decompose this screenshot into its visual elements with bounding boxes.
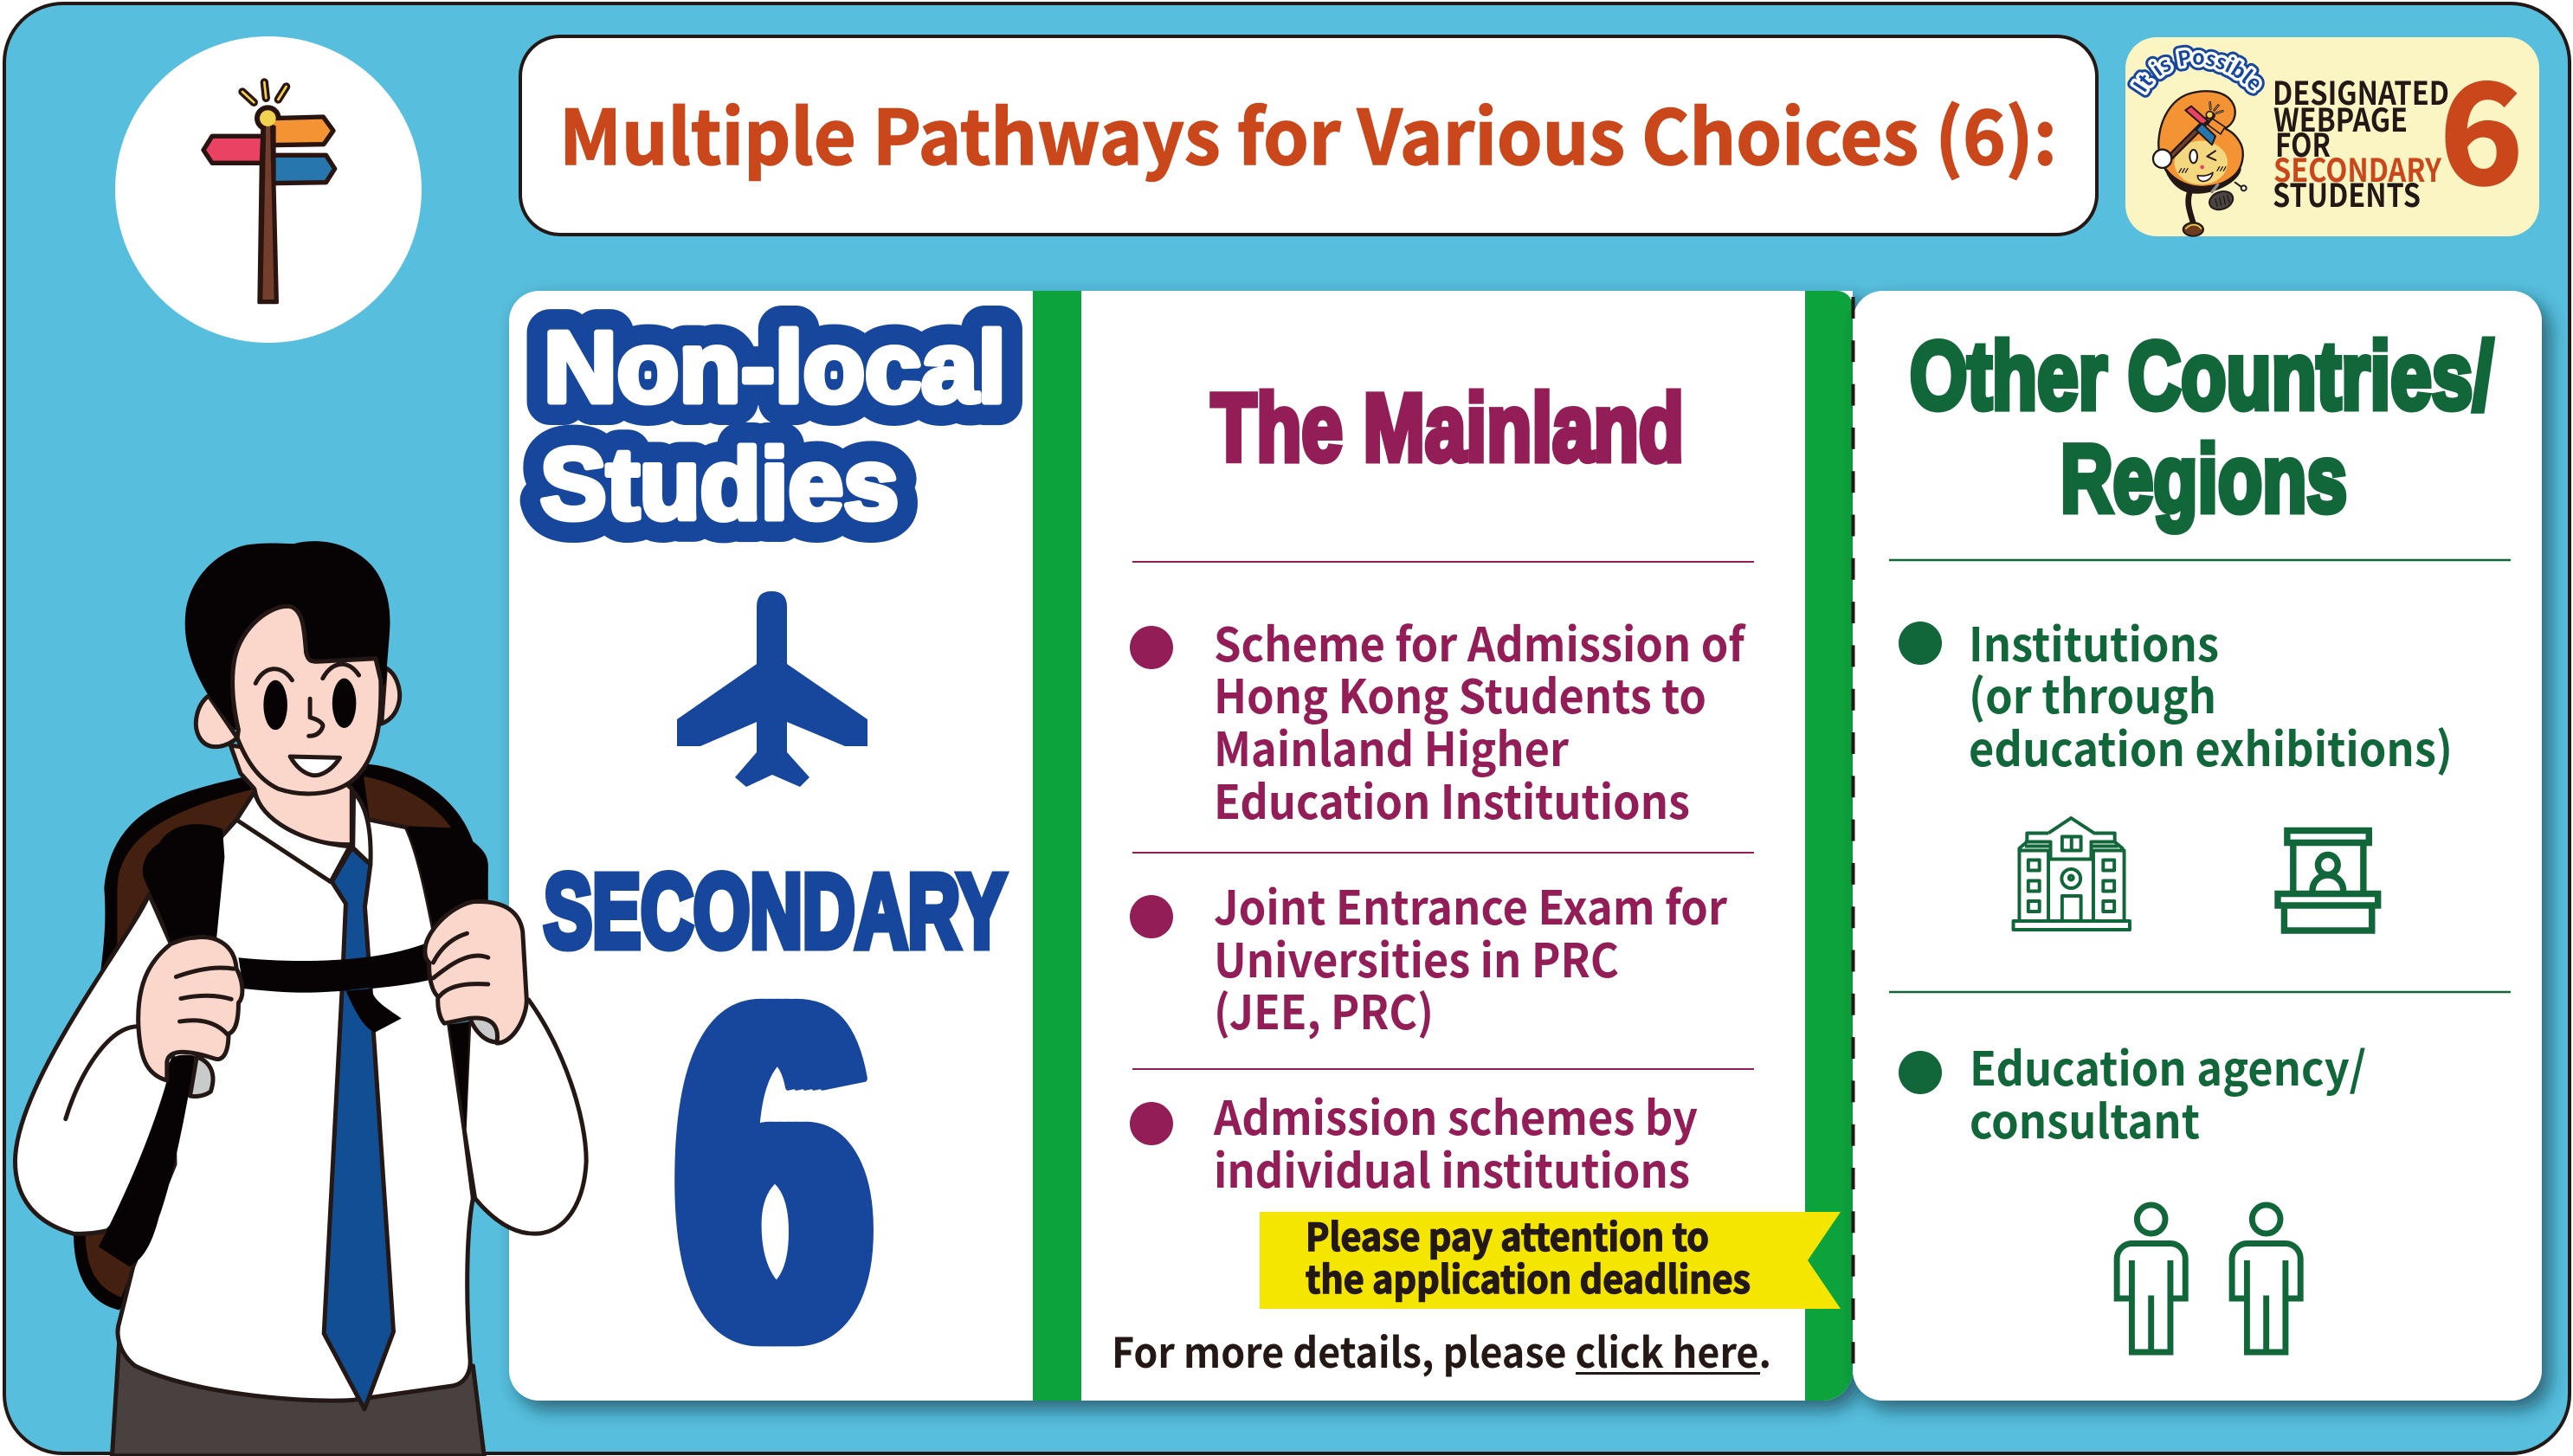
big number 6: 6	[665, 903, 848, 1440]
icon: two people	[2117, 1205, 2300, 1352]
badge label text: STUDENTS	[2273, 170, 2421, 216]
shirt	[118, 820, 473, 1401]
ears	[196, 667, 400, 747]
badge label text: SECONDARY	[2273, 145, 2441, 191]
item: scheme for admission: Education Institutions	[1214, 764, 1690, 833]
label: SECONDARY: SECONDARY	[544, 852, 1006, 970]
It is Possible arc label: It is Possible	[2130, 47, 2262, 95]
backpack straps lower	[99, 1021, 469, 1266]
mascot	[2127, 45, 2265, 237]
icon: airplane	[677, 591, 867, 787]
tie	[324, 847, 394, 1409]
item: admission schemes: Admission schemes by	[1213, 1080, 1698, 1149]
hair	[185, 541, 390, 733]
icon: signpost in white circle	[115, 36, 422, 343]
cuffs	[470, 1016, 499, 1042]
panel: non-local studies and the mainland	[509, 291, 1853, 1401]
heading: Non-local Studies: Non-local	[544, 311, 1006, 423]
heading: Non-local Studies: Non-local	[544, 311, 1006, 423]
item: institutions: (or through	[1969, 659, 2216, 727]
dashed divider	[1851, 297, 1854, 1376]
It is Possible arc label: It is Possible	[2127, 45, 2265, 98]
badge label text: WEBPAGE	[2273, 94, 2408, 141]
student character	[15, 541, 586, 1456]
item: joint entrance exam	[1130, 870, 1727, 1043]
other countries dividers and items	[1889, 560, 2511, 1152]
link text: more details: For more details, please click here.	[1112, 1319, 1771, 1380]
It is Possible arc label: It is Possible	[2133, 50, 2260, 92]
item: institutions: Institutions	[1969, 607, 2219, 675]
left hand	[139, 937, 242, 1080]
item: admission schemes	[1130, 1080, 1698, 1202]
item: joint entrance exam: Joint Entrance Exam for	[1214, 870, 1727, 938]
item: education agency: Education agency/	[1970, 1031, 2366, 1099]
heading: Non-local Studies: Studies	[540, 428, 899, 540]
heading: Other Countries / Regions: Regions	[2060, 426, 2347, 532]
mouth	[290, 757, 340, 776]
green column divider left	[1033, 291, 1081, 1401]
mainland list	[1130, 562, 1754, 1202]
heading: Other Countries / Regions	[1910, 323, 2493, 532]
heading: Non-local Studies: Studies	[540, 428, 899, 540]
right hand	[425, 902, 526, 1043]
icon: institution building	[2014, 818, 2130, 930]
right sleeve	[464, 1000, 586, 1234]
big number 6: 6	[700, 903, 883, 1440]
item: education agency	[1899, 1031, 2366, 1152]
badge label text: FOR	[2275, 119, 2331, 166]
nose	[309, 699, 323, 736]
sleeve fold	[66, 1027, 137, 1119]
panel: other countries	[1853, 291, 2542, 1401]
face	[233, 606, 381, 794]
badge: designated webpage for secondary students 6	[2125, 23, 2539, 237]
item: admission schemes: individual institutions	[1214, 1133, 1690, 1202]
item: scheme for admission: Mainland Higher	[1214, 712, 1569, 780]
callout ribbon: application deadlines: Please pay attention to	[1306, 1207, 1709, 1262]
left sleeve	[15, 894, 210, 1234]
title box	[520, 36, 2097, 235]
person two	[2232, 1205, 2300, 1352]
big number 6: 6	[674, 903, 857, 1440]
icon: exhibition booth	[2278, 831, 2378, 931]
big number 6: 6	[682, 903, 866, 1440]
badge number 6: 6	[2440, 23, 2523, 224]
green column divider right	[1805, 291, 1853, 1401]
title box: Multiple Pathways for Various Choices (6):	[559, 78, 2057, 187]
collar	[236, 792, 350, 882]
backpack straps upper	[143, 824, 224, 944]
badge label text: DESIGNATED	[2273, 68, 2449, 114]
item: institutions: education exhibitions)	[1969, 712, 2453, 780]
badge label text	[2273, 68, 2449, 216]
neck	[230, 745, 351, 845]
item: scheme for admission	[1130, 607, 1746, 833]
trousers	[112, 1341, 484, 1456]
heading: Non-local Studies	[540, 311, 1006, 540]
item: scheme for admission: Hong Kong Students to	[1214, 659, 1706, 727]
item: joint entrance exam: (JEE, PRC)	[1214, 975, 1434, 1043]
item: joint entrance exam: Universities in PRC	[1214, 923, 1619, 991]
eyes and eyebrows	[255, 664, 359, 730]
big number 6: 6	[691, 903, 874, 1440]
callout ribbon: application deadlines	[1260, 1207, 1841, 1309]
heading: The Mainland: The Mainland	[1211, 375, 1684, 481]
backpack	[74, 764, 488, 1310]
item: scheme for admission: Scheme for Admission of	[1214, 607, 1746, 675]
item: institutions	[1899, 607, 2453, 780]
chest strap	[238, 943, 429, 1032]
item: education agency: consultant	[1970, 1084, 2200, 1152]
callout ribbon: application deadlines: the application deadlines	[1306, 1249, 1751, 1305]
person one	[2117, 1205, 2185, 1352]
